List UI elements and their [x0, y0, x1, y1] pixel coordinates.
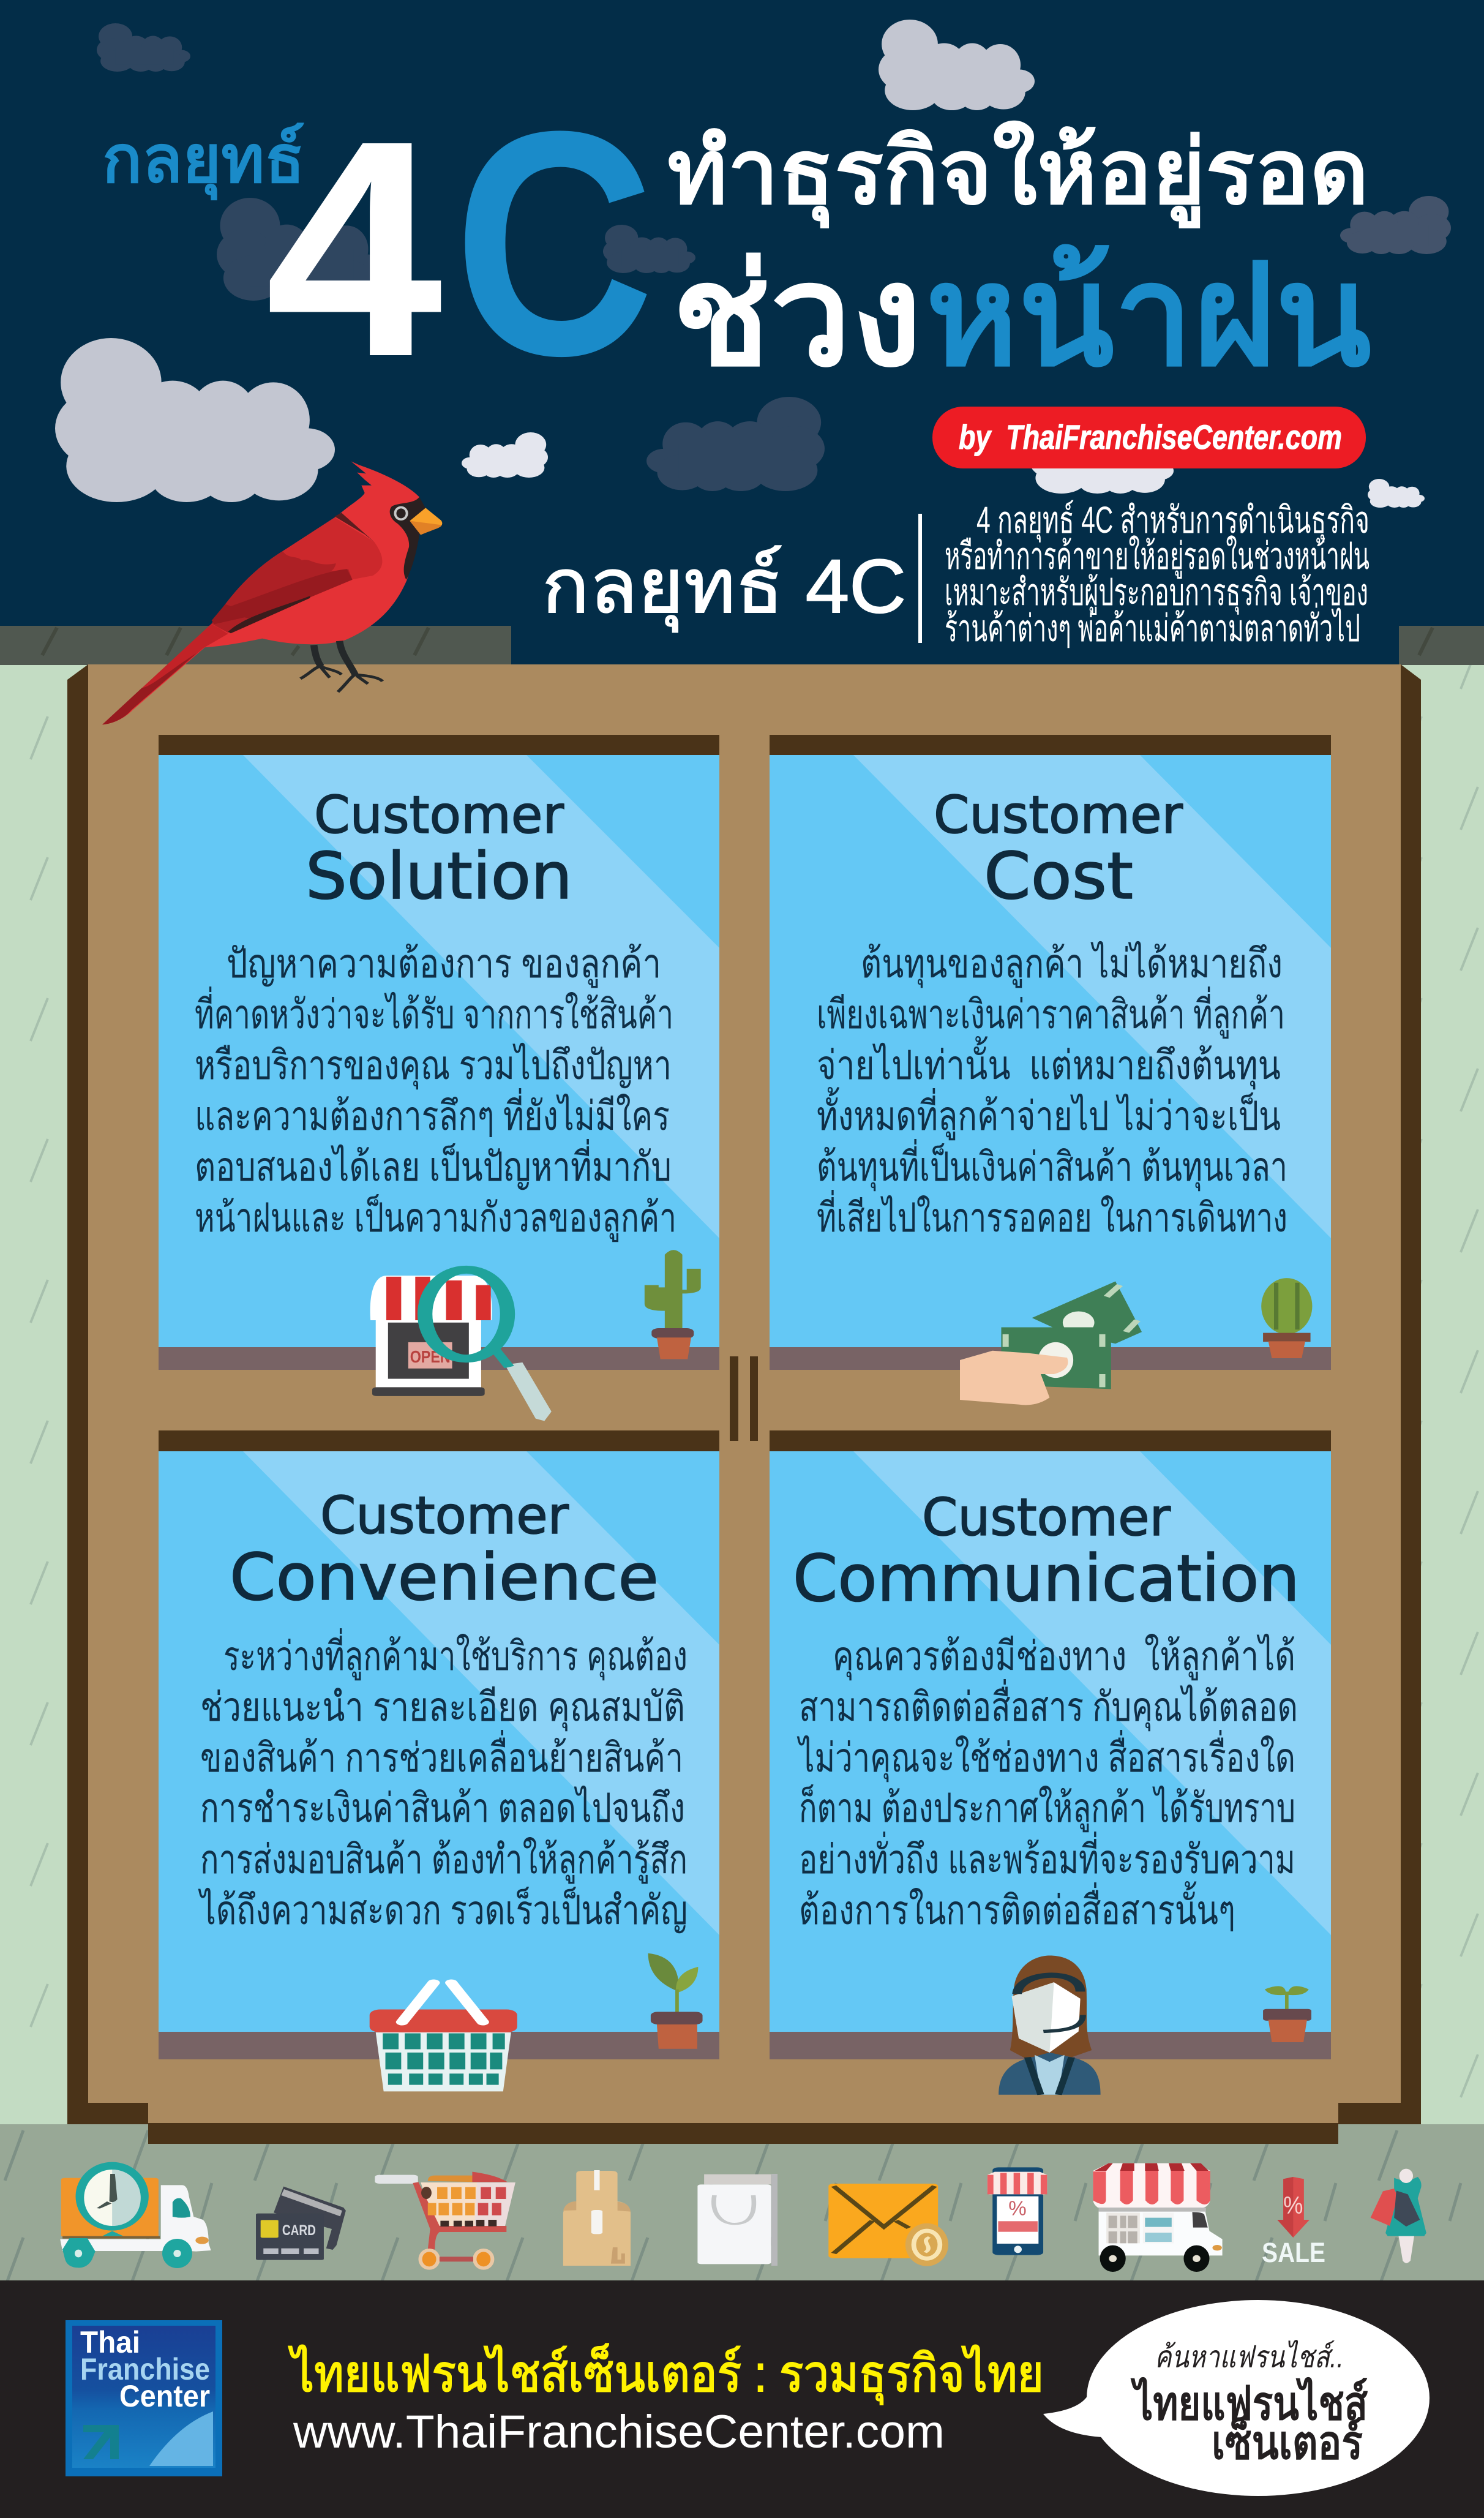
icon: hand with money — [960, 1281, 1142, 1405]
icon: cardboard box — [563, 2170, 631, 2266]
body text: และความต้องการลึกๆ ที่ยังไม่มีใคร — [195, 1088, 670, 1138]
body text: หรือบริการของคุณ รวมไปถึงปัญหา — [195, 1042, 672, 1090]
body text — [198, 1628, 688, 1933]
title line 1: ทำธุรกิจให้อยู่รอด — [667, 120, 1369, 229]
body text: ได้ถึงความสะดวก รวดเร็วเป็นสำคัญ — [198, 1886, 688, 1933]
body text: เพียงเฉพาะเงินค่าราคาสินค้า ที่ลูกค้า — [817, 987, 1285, 1039]
icon: phone discount — [987, 2167, 1047, 2255]
icon: food truck — [1093, 2163, 1223, 2272]
body text: การส่งมอบสินค้า ต้องทำให้ลูกค้ารู้สึก — [200, 1836, 688, 1884]
body text — [796, 1633, 1298, 1933]
icon: shopping bag — [697, 2174, 771, 2264]
bubble text: ค้นหาแฟรนไชส์.. — [1155, 2340, 1344, 2374]
title numeral 4: 4 — [265, 77, 444, 421]
heading: Customer — [314, 785, 564, 846]
body text: ไม่ว่าคุณจะใช้ช่องทาง สื่อสารเรื่องใด — [796, 1730, 1295, 1783]
badge: by ThaiFranchiseCenter.com: by ThaiFranchiseCenter.com — [959, 418, 1342, 456]
icon: sale arrow: % — [1283, 2192, 1303, 2219]
body text: ของสินค้า การช่วยเคลื่อนย้ายสินค้า — [200, 1730, 683, 1780]
heading: Convenience — [230, 1540, 659, 1615]
icon: shopping cart — [375, 2172, 515, 2270]
body text: ต้นทุนที่เป็นเงินค่าสินค้า ต้นทุนเวลา — [817, 1139, 1287, 1192]
icon: shop with magnifier: OPEN — [410, 1347, 451, 1366]
body text — [817, 941, 1287, 1240]
wall — [0, 664, 1484, 2134]
title — [102, 64, 1371, 422]
bubble text: ไทยแฟรนไชส์ — [1130, 2377, 1368, 2430]
body text: ระหว่างที่ลูกค้ามาใช้บริการ คุณต้อง — [223, 1628, 688, 1681]
icon: envelope with coin — [828, 2184, 948, 2266]
window frame — [67, 664, 1421, 2144]
floor — [0, 2124, 1484, 2280]
heading: Communication — [793, 1541, 1300, 1616]
header background — [0, 0, 1484, 664]
icon: basket — [370, 1983, 517, 2091]
body text: ที่เสียไปในการรอคอย ในการเดินทาง — [817, 1190, 1287, 1240]
body text: ก็ตาม ต้องประกาศให้ลูกค้า ได้รับทราบ — [799, 1784, 1295, 1833]
icon: cactus — [645, 1250, 701, 1359]
header paragraph — [945, 499, 1370, 649]
panel: customer solution — [159, 735, 719, 1421]
icon: shop with magnifier — [370, 1269, 552, 1421]
title line 2: ช่วง — [672, 236, 922, 394]
heading: Cost — [984, 839, 1133, 914]
title line 2 highlight: หน้าฝน — [926, 236, 1371, 394]
icon: phone discount: % — [1008, 2197, 1027, 2220]
badge: by ThaiFranchiseCenter.com — [932, 407, 1366, 468]
footer url: www.ThaiFranchiseCenter.com — [293, 2406, 945, 2458]
logo building — [149, 2411, 213, 2466]
panel: customer communication — [770, 1430, 1331, 2095]
logo text: Thai — [80, 2325, 140, 2359]
body text: ช่วยแนะนำ รายละเอียด คุณสมบัติ — [200, 1684, 685, 1732]
body text: ตอบสนองได้เลย เป็นปัญหาที่มากับ — [195, 1139, 672, 1190]
body text: ที่คาดหวังว่าจะได้รับ จากการใช้สินค้า — [195, 987, 673, 1037]
logo: Thai Franchise Center — [66, 2320, 222, 2476]
icon: round cactus — [1261, 1278, 1312, 1358]
icon: credit cards — [256, 2187, 346, 2260]
body text: จ่ายไปเท่านั้น แต่หมายถึงต้นทุน — [817, 1036, 1281, 1090]
body text: ต้องการในการติดต่อสื่อสารนั้นๆ — [799, 1881, 1235, 1933]
separator — [918, 514, 922, 643]
heading: Customer — [320, 1486, 569, 1546]
heading: Solution — [305, 839, 572, 914]
speech bubble — [1043, 2300, 1430, 2496]
body text: ทั้งหมดที่ลูกค้าจ่ายไป ไม่ว่าจะเป็น — [817, 1087, 1281, 1141]
bubble text: เซ็นเตอร์ — [1212, 2415, 1363, 2469]
text: SALE — [1262, 2237, 1325, 2268]
body text: อย่างทั่วถึง และพร้อมที่จะรองรับความ — [799, 1832, 1295, 1882]
icon: dress with tags — [1371, 2169, 1426, 2263]
title letter C: C — [454, 64, 654, 422]
icon: credit cards: CARD — [282, 2222, 316, 2239]
footer headline: ไทยแฟรนไชส์เซ็นเตอร์ : รวมธุรกิจไทย — [288, 2343, 1044, 2405]
icon: call centre agent — [999, 1956, 1101, 2095]
panel: customer cost — [770, 735, 1331, 1405]
icon: cardinal bird — [102, 461, 442, 724]
logo text: Franchise — [80, 2352, 210, 2386]
body text: สามารถติดต่อสื่อสาร กับคุณได้ตลอด — [799, 1679, 1298, 1732]
heading: Customer — [934, 785, 1183, 846]
body text: คุณควรต้องมีช่องทาง ให้ลูกค้าได้ — [833, 1633, 1295, 1681]
logo arrow — [83, 2425, 119, 2459]
icon: potted plant — [648, 1953, 703, 2049]
title word: กลยุทธ์: กลยุทธ์ — [102, 122, 305, 201]
icon: seedling — [1263, 1986, 1311, 2042]
roof ledge — [0, 626, 1484, 665]
footer background — [0, 2280, 1484, 2518]
panel: customer convenience — [159, 1430, 719, 2091]
body text — [195, 941, 676, 1242]
body text: หน้าฝนและ เป็นความกังวลของลูกค้า — [195, 1193, 676, 1242]
clouds — [55, 20, 1451, 508]
body text: ปัญหาความต้องการ ของลูกค้า — [227, 941, 661, 988]
logo text: Center — [119, 2379, 210, 2413]
body text: การชำระเงินค่าสินค้า ตลอดไปจนถึง — [200, 1785, 685, 1830]
body text: ต้นทุนของลูกค้า ไม่ได้หมายถึง — [861, 941, 1283, 988]
icon: sale arrow — [1262, 2177, 1325, 2268]
icon: truck with clock — [60, 2162, 211, 2268]
icon: shopping bag side — [771, 2174, 778, 2266]
heading: Customer — [922, 1487, 1171, 1548]
subtitle: กลยุทธ์ 4C: กลยุทธ์ 4C — [542, 544, 906, 633]
